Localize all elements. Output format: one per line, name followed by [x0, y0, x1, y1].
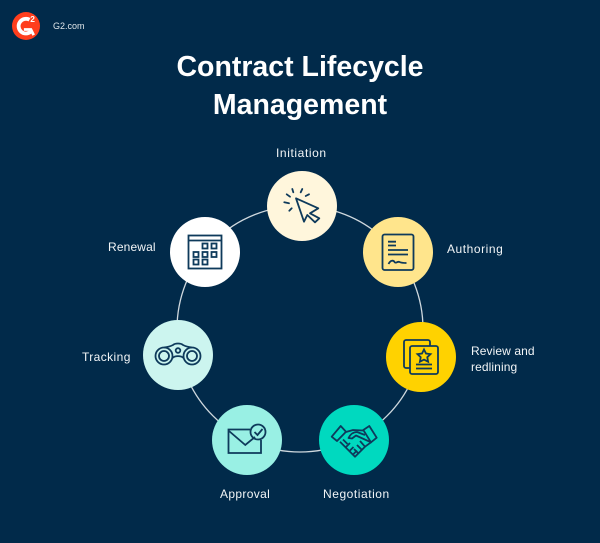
step: Initiation [267, 146, 337, 241]
logo text: G2.com [53, 21, 85, 31]
step: Negotiation [319, 405, 390, 501]
node: Approval circle with envelope icon [212, 405, 282, 475]
label: Initiation: Initiation [276, 146, 327, 160]
node: Review circle with certificate icon [386, 322, 456, 392]
step: Review and redlining [386, 322, 535, 392]
label: Review and redlining: redlining [471, 360, 517, 374]
node: Tracking circle with binoculars icon [143, 320, 213, 390]
step: Tracking [82, 320, 213, 390]
step: Approval [212, 405, 282, 501]
title [176, 51, 424, 120]
label: Negotiation: Negotiation [323, 487, 390, 501]
label: Tracking: Tracking [82, 350, 131, 364]
title: Contract Lifecycle [176, 51, 424, 83]
label: Review and redlining [471, 344, 535, 374]
step: Renewal [108, 217, 240, 287]
node: Authoring circle with document icon [363, 217, 433, 287]
label: Review and redlining: Review and [471, 344, 535, 358]
logo: G2 badge: 2 [30, 14, 35, 24]
label: Renewal: Renewal [108, 240, 156, 254]
label: Approval: Approval [220, 487, 270, 501]
node: Renewal circle with calendar icon [170, 217, 240, 287]
title: Management [213, 88, 387, 120]
label: Authoring: Authoring [447, 242, 503, 256]
node: Initiation circle with cursor icon [267, 171, 337, 241]
logo: G2 badge [12, 12, 40, 40]
node: Negotiation circle with handshake icon [319, 405, 389, 475]
step: Authoring [363, 217, 503, 287]
